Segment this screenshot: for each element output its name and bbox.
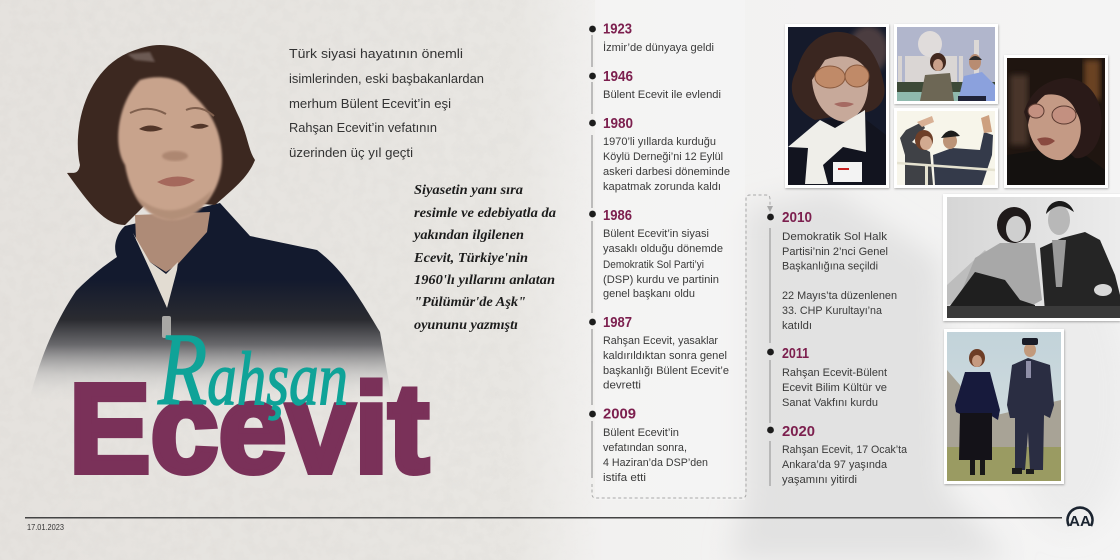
2020: yaşamını yitirdi	[782, 474, 857, 486]
italic side note: 1960'lı yıllarını anlatan	[414, 272, 555, 287]
logo: AA	[1068, 508, 1092, 530]
italic side note: resimle ve edebiyatla da	[414, 205, 556, 220]
1980	[603, 115, 730, 193]
1986	[603, 207, 723, 300]
2011: Sanat Vakfını kurdu	[782, 397, 878, 409]
1946: Bülent Ecevit ile evlendi	[603, 89, 721, 101]
2011: 2011	[782, 345, 809, 362]
neck	[135, 212, 210, 272]
1987: kaldırıldıktan sonra genel	[603, 350, 727, 362]
jacket	[24, 203, 392, 420]
1923: İzmir’de dünyaya geldi	[603, 41, 714, 54]
photo: portrait with tinted glasses	[785, 24, 889, 188]
2011: Rahşan Ecevit-Bülent	[782, 367, 887, 379]
2009	[603, 406, 708, 484]
1923: 1923	[603, 20, 632, 38]
1980: kapatmak zorunda kaldı	[603, 181, 721, 193]
2009: Bülent Ecevit’in	[603, 427, 679, 439]
1987	[603, 314, 729, 392]
1986: genel başkanı oldu	[603, 288, 695, 300]
2020: 2020	[782, 423, 815, 440]
timeline axis and dots	[589, 26, 596, 478]
italic side note	[412, 182, 556, 332]
1986: 1986	[603, 207, 632, 224]
2009: 2009	[603, 406, 636, 422]
2010: Demokratik Sol Halk	[782, 231, 888, 243]
timeline axis and dots	[767, 214, 774, 486]
2010	[782, 209, 897, 332]
logo: AA: AA	[1069, 513, 1091, 530]
photo: black and white couple portrait	[943, 194, 1120, 321]
2010: katıldı	[782, 320, 812, 332]
photo: Taj Mahal visit	[894, 24, 998, 104]
footer rule	[25, 517, 1062, 518]
1986: Bülent Ecevit’in siyasi	[603, 228, 709, 240]
1986: yasaklı olduğu dönemde	[603, 243, 723, 255]
2010: 33. CHP Kurultayı’na	[782, 305, 883, 317]
2010: Partisi’nin 2’nci Genel	[782, 246, 888, 258]
2011	[782, 345, 887, 409]
1987: başkanlığı Bülent Ecevit’e	[603, 365, 729, 377]
2010: Başkanlığına seçildi	[782, 260, 878, 272]
1923	[603, 20, 714, 54]
1986: Demokratik Sol Parti’yi	[603, 259, 704, 271]
timeline column 1	[589, 20, 730, 484]
2009: 4 Haziran’da DSP’den	[603, 457, 708, 469]
shirt collar	[133, 233, 178, 308]
1980: 1980	[603, 115, 633, 132]
1946: 1946	[603, 68, 633, 85]
intro text block	[289, 46, 484, 160]
photo: smiling portrait with glasses	[1004, 55, 1108, 188]
dashed connector arrow between timeline columns	[592, 195, 773, 498]
1986: (DSP) kurdu ve partinin	[603, 274, 719, 286]
photo: couple walking in a field	[944, 329, 1064, 484]
italic side note: "Pülümür'de Aşk"	[414, 294, 526, 309]
2011: Ecevit Bilim Kültür ve	[782, 382, 887, 394]
1987: devretti	[603, 380, 641, 392]
italic side note: oyununu yazmıştı	[414, 317, 518, 332]
2020	[782, 423, 908, 486]
2020: Rahşan Ecevit, 17 Ocak’ta	[782, 444, 908, 456]
zipper	[162, 316, 171, 338]
1980: askeri darbesi döneminde	[603, 166, 730, 178]
1980: Köylü Derneği’ni 12 Eylül	[603, 151, 723, 163]
2010: 22 Mayıs’ta düzenlenen	[782, 290, 897, 302]
date: 17.01.2023	[27, 522, 64, 532]
photo: couple waving	[894, 108, 998, 188]
face	[118, 77, 222, 220]
portrait of Rahşan Ecevit	[24, 45, 392, 420]
intro text block: isimlerinden, eski başbakanlardan	[289, 71, 484, 86]
intro text block: Rahşan Ecevit’in vefatının	[289, 120, 437, 135]
1980: 1970’li yıllarda kurduğu	[603, 136, 716, 148]
timeline column 2	[767, 209, 908, 486]
1987: Rahşan Ecevit, yasaklar	[603, 335, 718, 347]
italic side note: yakından ilgilenen	[412, 227, 524, 242]
1987: 1987	[603, 314, 632, 331]
2009: vefatından sonra,	[603, 442, 687, 454]
2010: 2010	[782, 209, 812, 226]
italic side note: Siyasetin yanı sıra	[414, 182, 523, 197]
intro text block: üzerinden üç yıl geçti	[289, 145, 413, 160]
1946	[603, 68, 721, 101]
2009: istifa etti	[603, 472, 646, 484]
eyes, nose and mouth	[130, 108, 214, 220]
2020: Ankara’da 97 yaşında	[782, 459, 888, 471]
title: Rahşan: Rahşan	[157, 312, 348, 427]
hair	[67, 45, 255, 225]
title: Ecevit: Ecevit	[69, 358, 429, 499]
italic side note: Ecevit, Türkiye'nin	[413, 250, 528, 265]
intro text block: merhum Bülent Ecevit’in eşi	[289, 96, 451, 111]
intro text block: Türk siyasi hayatının önemli	[289, 46, 463, 61]
